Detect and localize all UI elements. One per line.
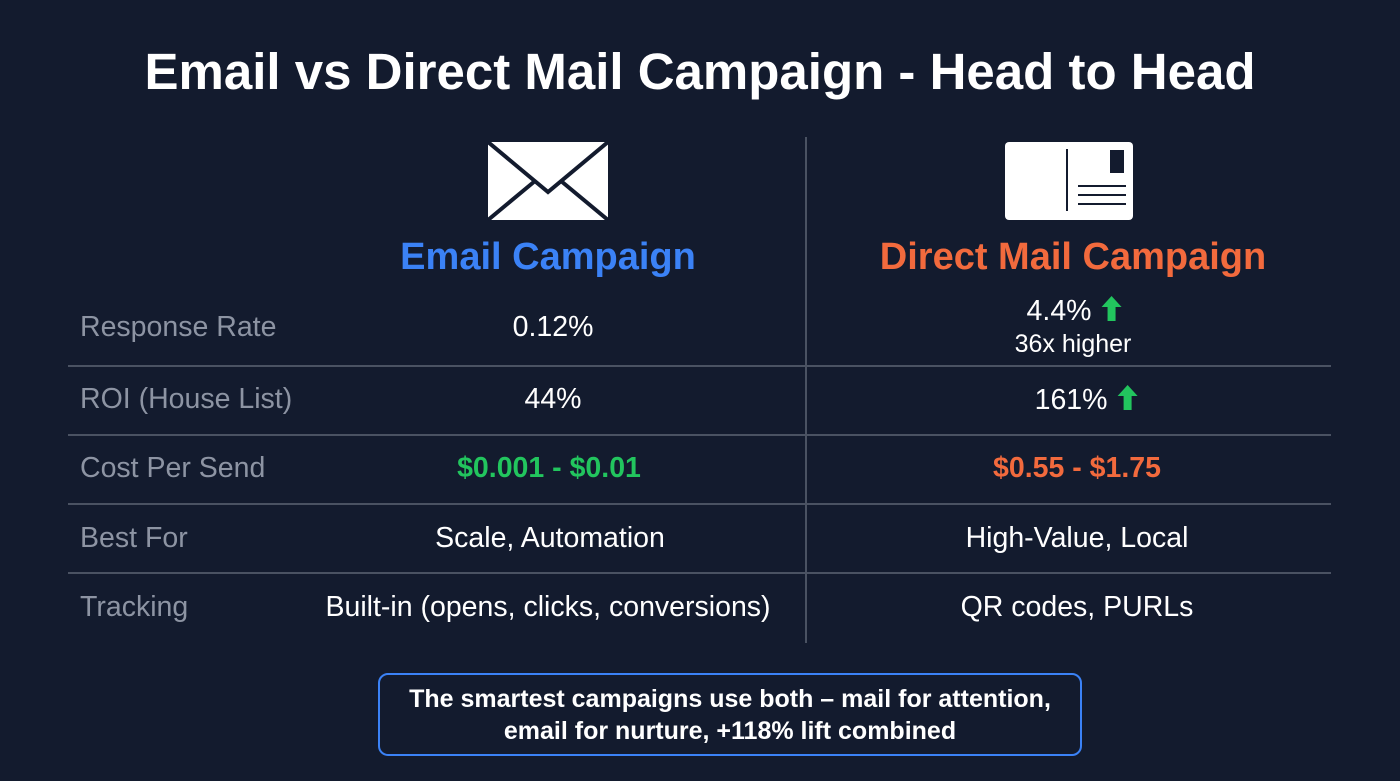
text: 36x higher xyxy=(1015,330,1131,358)
row: response rate: Response Rate xyxy=(80,311,276,343)
text: 44% xyxy=(524,383,582,415)
heading: email: Email Campaign xyxy=(400,236,696,278)
row: cost: Cost Per Send xyxy=(80,452,265,484)
heading: direct mail: Direct Mail Campaign xyxy=(880,236,1266,278)
callout: email for nurture, +118% lift combined xyxy=(504,717,956,745)
text: Scale, Automation xyxy=(435,522,665,554)
row: best for: Best For xyxy=(80,522,188,554)
text: 0.12% xyxy=(513,311,593,343)
callout xyxy=(378,673,1082,756)
row: tracking: Tracking xyxy=(80,591,188,623)
text: Built-in (opens, clicks, conversions) xyxy=(325,591,771,623)
text: $0.55 - $1.75 xyxy=(993,452,1161,484)
title: Email vs Direct Mail Campaign - Head to Head xyxy=(145,43,1255,100)
icon: envelope xyxy=(488,142,608,220)
text: 4.4% xyxy=(1027,295,1092,327)
text: 161% xyxy=(1035,384,1108,416)
icon: postcard xyxy=(1005,142,1133,220)
text: QR codes, PURLs xyxy=(961,591,1193,623)
callout: The smartest campaigns use both – mail for attention, xyxy=(409,685,1051,713)
text: High-Value, Local xyxy=(966,522,1188,554)
row: roi: ROI (House List) xyxy=(80,383,292,415)
text: $0.001 - $0.01 xyxy=(457,452,641,484)
